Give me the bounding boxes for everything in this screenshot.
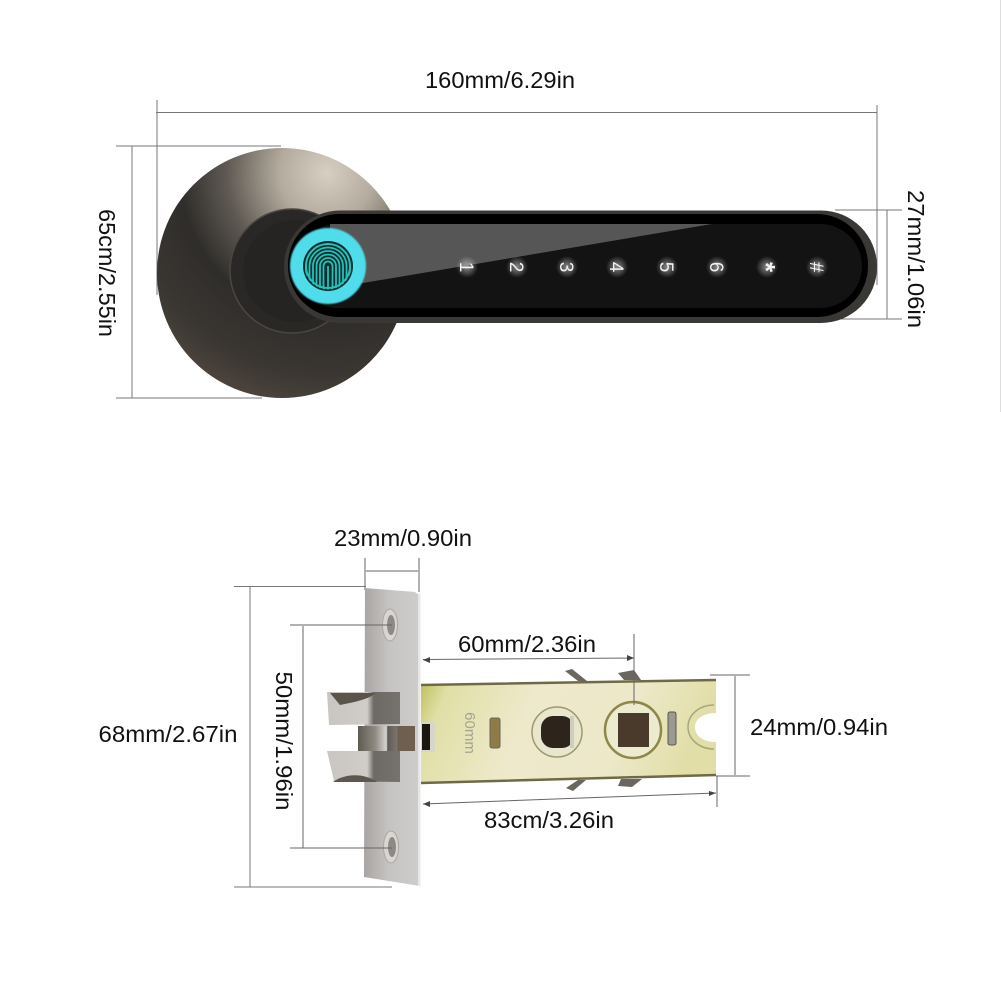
keypad digits: 3 (555, 262, 576, 272)
dimension: backset (423, 631, 634, 705)
dimension: backset: 60mm/2.36in (458, 631, 596, 657)
dimension infographic (99, 0, 1001, 888)
dimension: lever height: 27mm/1.06in (903, 190, 929, 328)
dimension: plate height: 68mm/2.67in (98, 721, 238, 747)
dimension: case length (423, 776, 717, 833)
right edge line (1000, 0, 1001, 412)
keypad digits: 2 (505, 262, 526, 272)
keypad digits (455, 256, 828, 278)
dimension: plate height (98, 586, 392, 887)
upper latch (327, 692, 400, 725)
case top and bottom edges (421, 680, 716, 783)
round rose (157, 148, 407, 398)
notch rim (688, 705, 714, 749)
keypad digits: * (751, 262, 781, 273)
slot (668, 712, 676, 745)
neck (243, 220, 347, 322)
lever handle (284, 210, 877, 323)
lower latch (327, 751, 400, 782)
dimension: case height: 24mm/0.94in (750, 714, 888, 740)
dimension: rose diameter: 65cm/2.55in (94, 209, 120, 337)
title dimension: total length (156, 67, 877, 295)
dimension: case length: 83cm/3.26in (484, 807, 614, 833)
dimension: lever height (835, 190, 929, 328)
keypad digits: 1 (455, 262, 476, 272)
fingerprint sensor (290, 228, 366, 304)
dimension: case height (710, 675, 888, 776)
latch case body (421, 680, 716, 783)
centre latch (358, 726, 415, 751)
glass highlight (330, 224, 712, 290)
case tab (421, 722, 435, 752)
keypad digits: # (805, 262, 826, 273)
stamped size: 60mm (461, 712, 478, 754)
collar (230, 209, 354, 333)
dimension: plate width: 23mm/0.90in (334, 525, 472, 551)
spring tabs (565, 669, 642, 791)
oval bolt hole (532, 707, 582, 757)
dimension: screw spacing (271, 625, 392, 848)
face plate (364, 588, 420, 886)
keypad digits: 4 (605, 262, 626, 273)
title dimension: total length: 160mm/6.29in (425, 67, 575, 93)
screw holes (382, 609, 398, 641)
keypad digits: 5 (655, 262, 676, 272)
spindle square hole (618, 713, 649, 747)
dimension: plate width (334, 525, 472, 592)
keypad digits: 6 (705, 262, 726, 272)
dimension: screw spacing: 50mm/1.96in (271, 672, 297, 810)
dimension: rose diameter (94, 146, 281, 398)
spindle ring (605, 702, 661, 758)
small window (490, 718, 500, 748)
door lever lock (157, 148, 877, 398)
gap beside centre latch (327, 725, 358, 751)
mortise latch (327, 588, 716, 886)
